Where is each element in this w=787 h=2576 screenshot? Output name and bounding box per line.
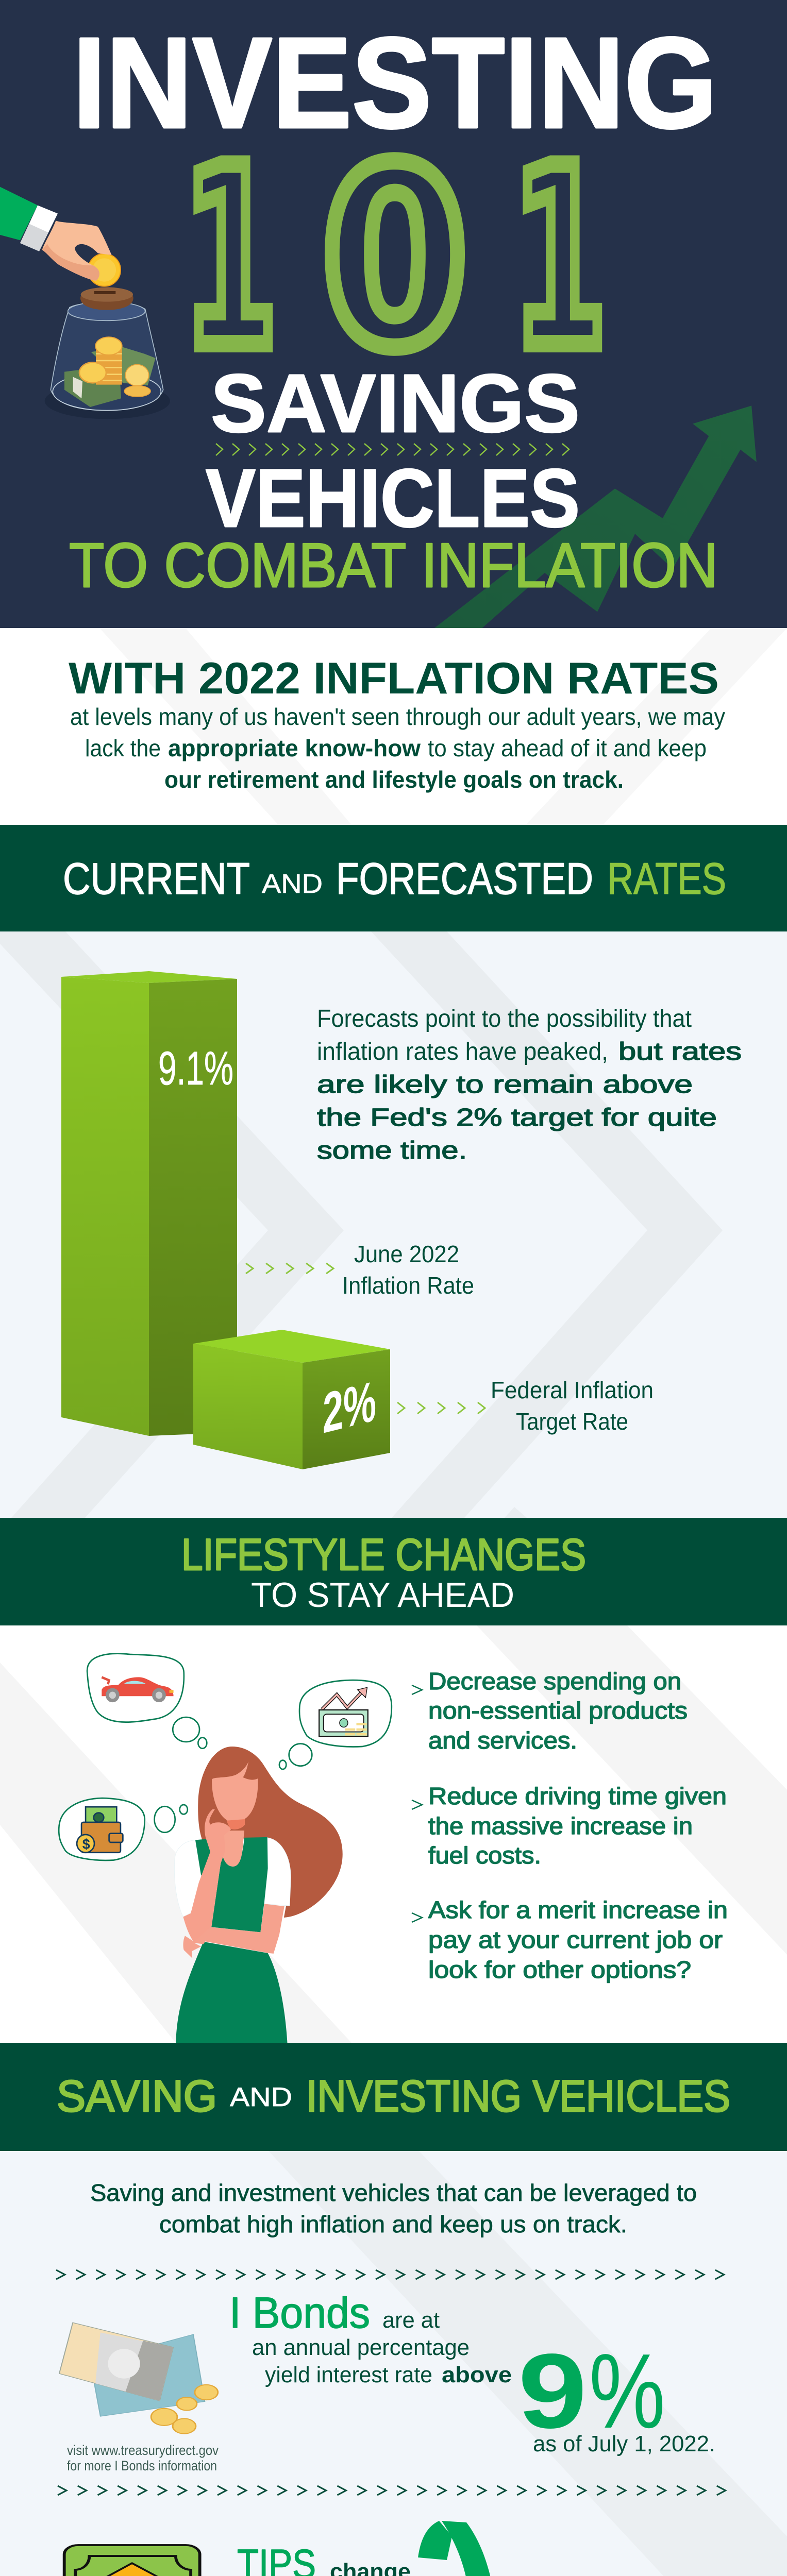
chevron row: before TIPS (57, 2485, 728, 2497)
label: federal inflation target rate (396, 1377, 654, 1435)
banner: current and forecasted rates: FORECASTED (336, 854, 593, 904)
panel: rates background (0, 931, 787, 1518)
text block: forecasts (317, 1005, 742, 1164)
bullet: decrease spending: and services. (428, 1727, 577, 1754)
title: Savings: SAVINGS (211, 357, 580, 449)
text block: forecasts: some time. (317, 1137, 467, 1164)
label: federal inflation target rate: Federal Inflation (491, 1377, 654, 1403)
decorative chevron (269, 2151, 787, 2576)
title: To combat inflation: TO COMBAT INFLATION (69, 530, 718, 600)
banner: saving and investing vehicles: SAVING (57, 2072, 217, 2121)
bullet: merit increase: pay at your current job or (428, 1926, 723, 1953)
skirt (176, 1942, 288, 2043)
decorative chevrons (0, 931, 723, 1518)
sleeves (174, 1838, 291, 1917)
banner: lifestyle changes: TO STAY AHEAD (251, 1575, 514, 1615)
text block: forecasts: are likely to remain above (317, 1071, 693, 1098)
bar: federal target: 2% (323, 1369, 376, 1446)
text block: intro: appropriate know-how (168, 735, 421, 761)
icon: wallet: $ (82, 1836, 90, 1852)
icon: car (102, 1677, 174, 1702)
bullet: decrease spending: non-essential products (428, 1697, 688, 1724)
stat: 9%: % (589, 2332, 665, 2450)
decorative band (99, 628, 787, 825)
thought bubbles (59, 1654, 392, 1860)
section: I Bonds: as of July 1, 2022. (533, 2431, 715, 2456)
arm raised (183, 1809, 231, 1944)
section: I Bonds: an annual percentage (252, 2335, 470, 2360)
title: Vehicles: VEHICLES (206, 452, 580, 544)
text block: forecasts: inflation rates have peaked, (317, 1038, 608, 1065)
text block: forecasts: Forecasts point to the possibility that (317, 1005, 692, 1032)
banner: current and forecasted rates: CURRENT (63, 854, 250, 904)
icon: cycle arrows (397, 2521, 509, 2576)
text block: intro: to stay ahead of it and keep (428, 735, 707, 761)
bullet: reduce driving: Reduce driving time given (428, 1783, 727, 1809)
icon: wallet (77, 1807, 123, 1853)
chevron row: before I Bonds (55, 2269, 727, 2281)
bar: june 2022 inflation (61, 971, 237, 1436)
panel: vehicles background (0, 2151, 787, 2576)
background: hero navy (0, 0, 787, 628)
text block: intro: our retirement and lifestyle goals on track. (164, 766, 624, 793)
section: I Bonds (59, 2289, 715, 2473)
title: 101 (183, 115, 607, 402)
arrow: money growth arrow (434, 405, 757, 628)
text block: lifestyle bullets (412, 1668, 728, 1983)
text block: intro (70, 703, 725, 793)
forearm (183, 1904, 284, 1958)
heading: with 2022 inflation rates: WITH 2022 INFLATION RATES (69, 654, 719, 703)
text block: vehicles intro: Saving and investment vehicles that can be leveraged to (90, 2179, 697, 2206)
text block: forecasts: but rates (618, 1038, 742, 1065)
bullet: decrease spending: Decrease spending on (428, 1668, 681, 1694)
section: I Bonds: yield interest rate (265, 2362, 432, 2387)
bar: june 2022 inflation: 9.1% (158, 1042, 233, 1095)
stat: 9%: 9 (518, 2332, 587, 2450)
label: june 2022 inflation rate: Inflation Rate (342, 1272, 474, 1299)
bullet: reduce driving: fuel costs. (428, 1842, 541, 1869)
hair (198, 1747, 343, 1918)
bullet: reduce driving (412, 1783, 727, 1869)
banner: lifestyle changes: LIFESTYLE CHANGES (181, 1530, 586, 1580)
icon: hand dropping coin into jar (42, 221, 170, 419)
text block: vehicles intro: combat high inflation and keep us on track. (159, 2211, 627, 2238)
title: 101: 1 (512, 115, 607, 402)
title: Investing: INVESTING (73, 11, 717, 155)
neck (223, 1819, 245, 1867)
panel: lifestyle background (0, 1625, 787, 2043)
text block: intro: at levels many of us haven't seen through our adult years, we may (70, 703, 725, 730)
banner: current and forecasted rates: RATES (607, 854, 726, 904)
title: 101: 0 (322, 115, 467, 402)
section: I Bonds: are at (382, 2308, 440, 2333)
banner: saving and investing vehicles: AND (230, 2082, 292, 2112)
bar: federal target (193, 1330, 390, 1469)
bullet: merit increase: Ask for a merit increase in (428, 1896, 728, 1923)
dress top (195, 1837, 268, 1933)
caption: for more I Bonds information (67, 2458, 217, 2473)
text: I Bonds: I Bonds (229, 2289, 370, 2337)
banner: saving and investing vehicles: INVESTING VEHICLES (306, 2072, 730, 2121)
title: 101: 1 (183, 115, 277, 402)
bar chart: inflation bars (61, 971, 390, 1469)
bullet: reduce driving: the massive increase in (428, 1812, 693, 1839)
label: june 2022 inflation rate (245, 1241, 474, 1299)
icon: sleeve and cuff (0, 187, 58, 251)
bullet: merit increase: look for other options? (428, 1956, 691, 1983)
illustration: thinking woman (59, 1654, 392, 2043)
panel: intro background (0, 628, 787, 825)
label: june 2022 inflation rate: June 2022 (354, 1241, 459, 1267)
icon: treasury bond certificate (64, 2545, 200, 2576)
decorative stripes (0, 1625, 787, 2043)
face (212, 1761, 258, 1822)
icon: banknotes and coins (59, 2323, 218, 2434)
chevron row: hero (215, 443, 571, 456)
banner: saving and investing vehicles (0, 2043, 787, 2151)
text block: forecasts: the Fed's 2% target for quite (317, 1104, 717, 1131)
banner: current and forecasted rates: AND (262, 869, 323, 899)
caption: visit www.treasurydirect.gov (67, 2443, 219, 2458)
label: federal inflation target rate: Target Rate (516, 1408, 628, 1435)
caption (67, 2443, 219, 2473)
text block: intro: lack the (85, 735, 161, 761)
banner: lifestyle changes (0, 1518, 787, 1625)
section: TIPS (64, 2521, 709, 2576)
banner: current and forecasted rates (0, 825, 787, 931)
bullet: decrease spending (412, 1668, 688, 1754)
stat: 9% (518, 2332, 665, 2450)
bullet: merit increase (412, 1896, 728, 1983)
text block: vehicles intro (90, 2179, 697, 2238)
icon: stock money (319, 1687, 368, 1736)
section: I Bonds: above (442, 2362, 512, 2387)
